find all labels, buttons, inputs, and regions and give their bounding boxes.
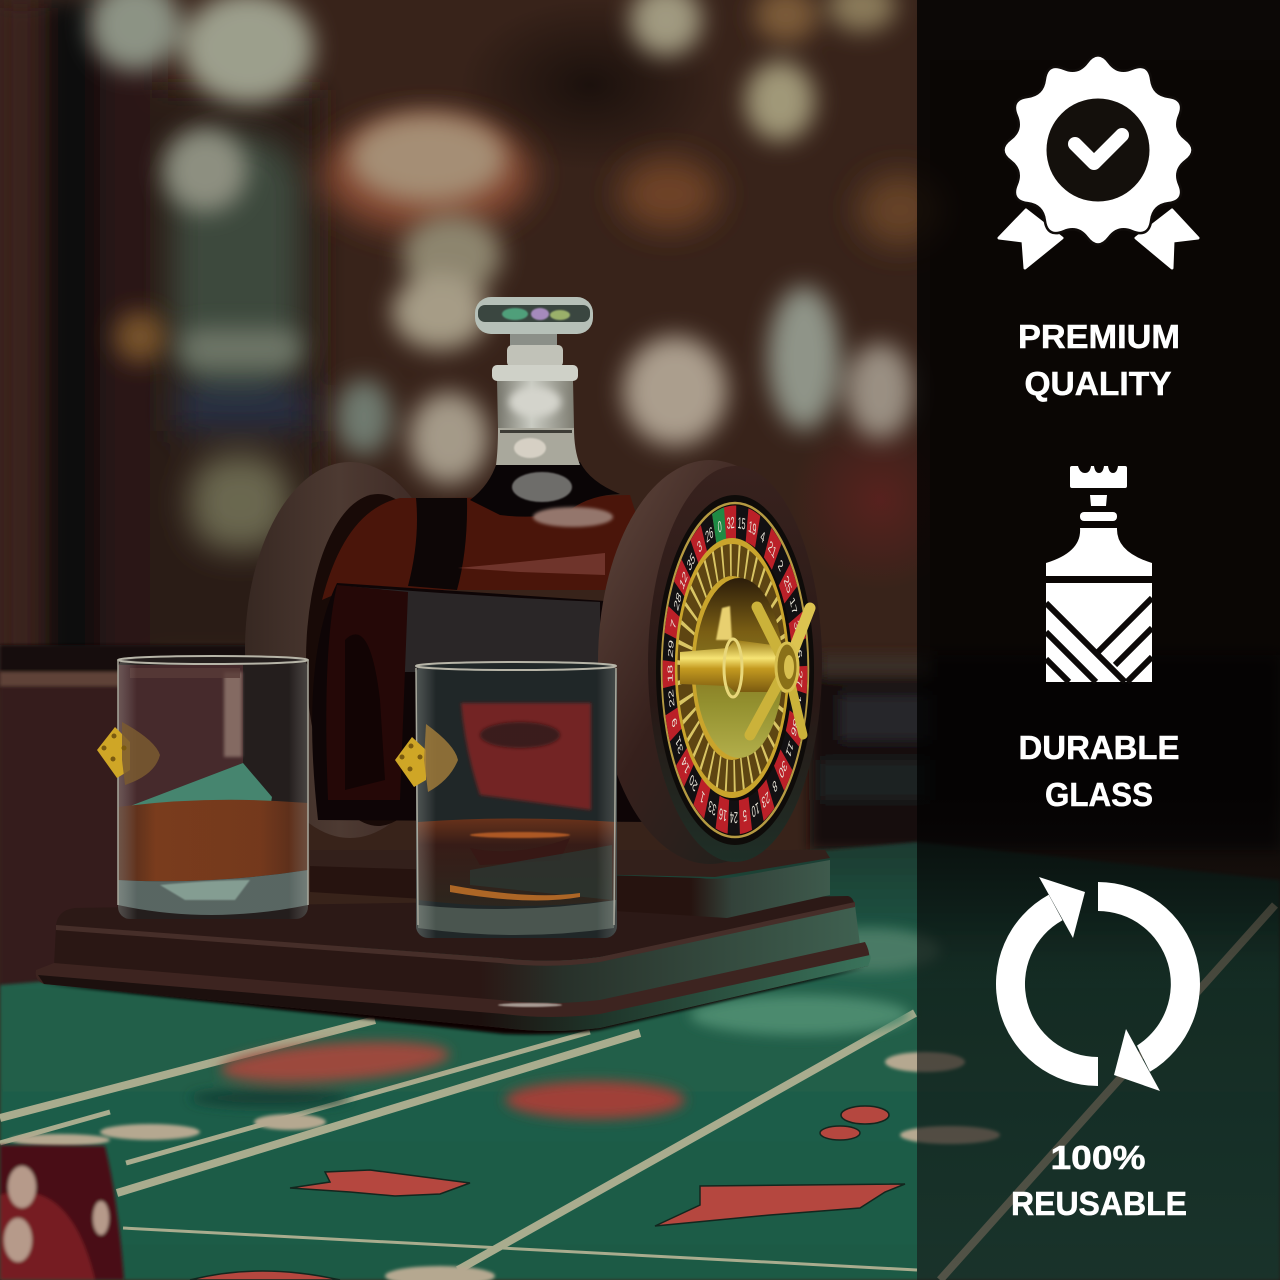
number ring: 22 bbox=[667, 688, 676, 709]
number ring: 18 bbox=[666, 664, 674, 683]
number ring: 13 bbox=[793, 693, 803, 714]
number ring: 14 bbox=[680, 753, 691, 778]
number ring: 27 bbox=[795, 669, 804, 688]
number ring: 2 bbox=[776, 556, 785, 575]
icon: reuse arrows bbox=[996, 877, 1200, 1091]
number ring: 5 bbox=[742, 806, 747, 825]
number ring: 29 bbox=[666, 638, 675, 659]
scalloped seal bbox=[1005, 57, 1191, 243]
number ring: 17 bbox=[788, 594, 799, 618]
casino table felt bbox=[0, 842, 1280, 1280]
table markings bbox=[0, 905, 1275, 1280]
heading: premium quality: PREMIUM bbox=[1018, 318, 1180, 355]
heading: premium quality: QUALITY bbox=[1024, 365, 1172, 402]
glass stopper bbox=[475, 297, 593, 381]
barrel-shaped glass decanter bbox=[312, 462, 660, 822]
number ring: 12 bbox=[678, 568, 689, 593]
icon: quality badge bbox=[999, 57, 1198, 268]
turret cross arms bbox=[750, 607, 810, 735]
decanter shoulder bbox=[470, 462, 620, 517]
number ring: 9 bbox=[670, 715, 679, 730]
rear wooden disc bbox=[245, 462, 455, 838]
gold die bbox=[97, 722, 160, 785]
foreground red die bbox=[0, 1145, 124, 1280]
number ring: 1 bbox=[699, 787, 706, 807]
number ring: 10 bbox=[750, 798, 760, 821]
number ring: 21 bbox=[767, 537, 778, 562]
heading: premium quality bbox=[1018, 318, 1180, 402]
number ring: 31 bbox=[674, 733, 685, 757]
number ring: 25 bbox=[782, 572, 793, 597]
number ring: 24 bbox=[730, 808, 738, 826]
stand: lower tier bbox=[36, 896, 871, 1031]
heading: durable glass bbox=[1018, 729, 1180, 813]
golden frets ring bbox=[675, 538, 789, 798]
decanter neck bbox=[496, 380, 580, 465]
number ring: 0 bbox=[717, 517, 723, 537]
number ring: 16 bbox=[718, 804, 728, 825]
number ring: 8 bbox=[771, 776, 779, 796]
heading: durable glass: GLASS bbox=[1045, 776, 1153, 813]
number ring: 36 bbox=[789, 716, 800, 739]
icon: decanter bottle bbox=[1046, 466, 1152, 682]
number ring: 35 bbox=[685, 549, 697, 575]
right dark benefits panel bbox=[917, 0, 1280, 1280]
heading: 100% reusable: 100% bbox=[1050, 1139, 1146, 1176]
number ring: 3 bbox=[696, 537, 704, 557]
heading: 100% reusable bbox=[1011, 1139, 1187, 1222]
heading: 100% reusable: REUSABLE bbox=[1011, 1185, 1187, 1222]
number ring bbox=[650, 477, 820, 863]
number ring: 15 bbox=[737, 514, 746, 534]
golden hub cone bbox=[695, 578, 783, 758]
decanter set on wooden stand bbox=[36, 297, 871, 1034]
front wooden roulette disc bbox=[598, 460, 822, 864]
number ring: 26 bbox=[704, 523, 715, 547]
number ring: 4 bbox=[759, 527, 766, 547]
number ring: 11 bbox=[784, 737, 795, 761]
gold die bbox=[395, 724, 458, 792]
number ring: 28 bbox=[672, 589, 683, 614]
badge ribbons bbox=[999, 210, 1198, 268]
check mark disc bbox=[1046, 98, 1150, 202]
left shot glass with dice bbox=[97, 656, 308, 919]
number ring: 32 bbox=[726, 514, 735, 533]
number ring: 7 bbox=[669, 617, 678, 631]
number ring: 30 bbox=[777, 756, 788, 782]
number ring: 20 bbox=[688, 770, 699, 796]
hub spindle bbox=[680, 606, 790, 697]
number ring: 33 bbox=[707, 796, 717, 819]
roulette wheel bbox=[650, 477, 820, 863]
number ring: 6 bbox=[795, 648, 804, 659]
wooden counter and dark bar strip bbox=[0, 645, 260, 992]
heading: durable glass: DURABLE bbox=[1018, 729, 1180, 766]
stand: shadow bbox=[42, 968, 865, 1034]
right shot glass with dice bbox=[395, 662, 617, 938]
number ring: 19 bbox=[748, 517, 757, 539]
number ring: 34 bbox=[792, 618, 802, 641]
number ring: 23 bbox=[760, 788, 771, 812]
stand: upper tier bbox=[310, 850, 830, 918]
